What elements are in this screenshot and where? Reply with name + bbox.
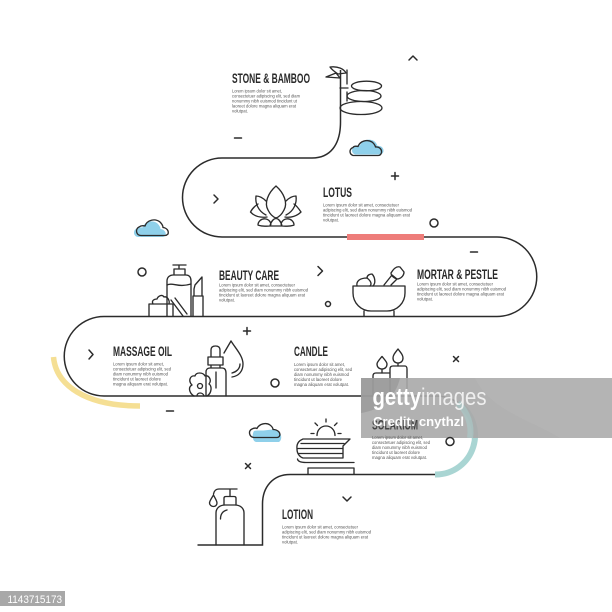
text block: massage oil: diam nonummy nibh euismod (113, 372, 168, 376)
text block: candle: diam nonummy nibh euismod (294, 372, 349, 377)
text block: massage oil: tincidunt ut laoreet dolore (113, 376, 161, 382)
icon: candles (373, 349, 407, 396)
heading: massage oil: MASSAGE OIL (113, 344, 172, 359)
icon: lotus flower (250, 186, 301, 226)
text block: stone and bamboo: volutpat. (232, 108, 248, 114)
text block: candle: magna aliquam erat volutpat. (294, 382, 349, 387)
text block: solarium: Lorem ipsum dolor sit amet, (372, 435, 423, 440)
text block: stone and bamboo: Lorem ipsum dolor sit amet, (232, 88, 282, 94)
icon: sun over folded towels (297, 419, 354, 474)
icon: cosmetics (149, 265, 203, 316)
text block: mortar and pestle: tincidunt ut laoreet dolore magna aliquam erat (417, 292, 505, 296)
text block: lotus: volutpat. (323, 218, 339, 222)
accent: yellow arc (54, 357, 140, 406)
panel: candle (294, 344, 407, 396)
text block: candle: consectetuer adipiscing elit, sed (294, 367, 352, 372)
watermark logo and credit (372, 384, 486, 429)
icon: cloud top right (350, 140, 384, 156)
text block: mortar and pestle: adipiscing elit, sed diam nonummy nibh euismod (417, 286, 506, 292)
panel: beauty care (149, 265, 308, 316)
text block: lotion: adipiscing elit, sed diam nonummy nibh euismod (282, 530, 371, 534)
text block: solarium: diam nonummy nibh euismod (372, 445, 427, 450)
icon: cloud left (134, 220, 168, 237)
panel: lotion (210, 489, 371, 545)
text block: solarium: consectetuer adipiscing elit, sed (372, 440, 430, 445)
icon: stones and bamboo (326, 67, 382, 114)
heading: lotus: LOTUS (323, 185, 352, 200)
text block: solarium: tincidunt ut laoreet dolore (372, 450, 420, 455)
text block: beauty care: tincidunt ut laoreet dolore magna aliquam erat (219, 292, 306, 298)
text block: mortar and pestle: volutpat. (417, 296, 433, 302)
text block: beauty care: volutpat. (219, 298, 235, 302)
accent: salmon bar (347, 234, 424, 240)
panel: solarium (372, 418, 430, 460)
heading: beauty care: BEAUTY CARE (219, 268, 279, 283)
text block: beauty care: Lorem ipsum dolor sit amet, consectetuer (219, 282, 295, 288)
text block: mortar and pestle: Lorem ipsum dolor sit amet, consectetuer (417, 282, 493, 286)
text block: solarium: magna aliquam erat volutpat. (372, 455, 427, 460)
text block: massage oil: magna aliquam erat volutpat. (113, 382, 168, 386)
watermark backdrop (361, 378, 612, 438)
text block: stone and bamboo: laoreet dolore magna aliquam erat (232, 104, 297, 108)
panel: mortar and pestle (353, 267, 506, 316)
icon: lotion pump bottle (210, 489, 244, 545)
text block: stone and bamboo: nonummy nibh euismod tincidunt ut (232, 98, 298, 104)
text block: stone and bamboo: consectetuer adipiscing elit, sed diam (232, 94, 300, 98)
text block: candle: tincidunt ut laoreet dolore (294, 377, 342, 382)
panel: massage oil (113, 341, 243, 396)
text block: lotus: adipiscing elit, sed diam nonummy nibh euismod (323, 208, 412, 212)
text block: lotion: tincidunt ut laoreet dolore magna aliquam erat (282, 534, 369, 540)
winding roadmap path (64, 70, 537, 545)
icon: cloud lower (250, 424, 281, 442)
heading: candle: CANDLE (294, 344, 328, 359)
text block: lotion: Lorem ipsum dolor sit amet, consectetuer (282, 524, 358, 530)
watermark logo: gettyimages (372, 384, 486, 411)
accent: teal arc (435, 403, 475, 474)
text block: massage oil: Lorem ipsum dolor sit amet, (113, 362, 164, 366)
text block: lotion: volutpat. (282, 540, 298, 544)
text block: lotus: Lorem ipsum dolor sit amet, consectetuer (323, 202, 399, 208)
text block: beauty care: adipiscing elit, sed diam nonummy nibh euismod (219, 288, 308, 292)
panel: stone and bamboo (232, 67, 382, 114)
circle marker by solarium (446, 438, 454, 446)
image id tag (0, 591, 65, 606)
panel: lotus (250, 185, 412, 226)
icon: dropper bottle with flower (190, 341, 243, 396)
text block: massage oil: consectetuer adipiscing elit, sed (113, 366, 171, 372)
heading: stone and bamboo: STONE & BAMBOO (232, 71, 310, 86)
text block: lotus: tincidunt ut laoreet dolore magna aliquam erat (323, 212, 411, 218)
heading: lotion: LOTION (282, 507, 313, 522)
heading: solarium: SOLARIUM (372, 418, 418, 432)
decorative markers (89, 56, 478, 501)
heading: mortar and pestle: MORTAR & PESTLE (417, 267, 498, 282)
watermark credit: Credit: cnythzl (373, 414, 464, 429)
text block: candle: Lorem ipsum dolor sit amet, (294, 362, 345, 367)
image id number: 1143715173 (8, 594, 62, 606)
icon: mortar and pestle (353, 267, 405, 316)
